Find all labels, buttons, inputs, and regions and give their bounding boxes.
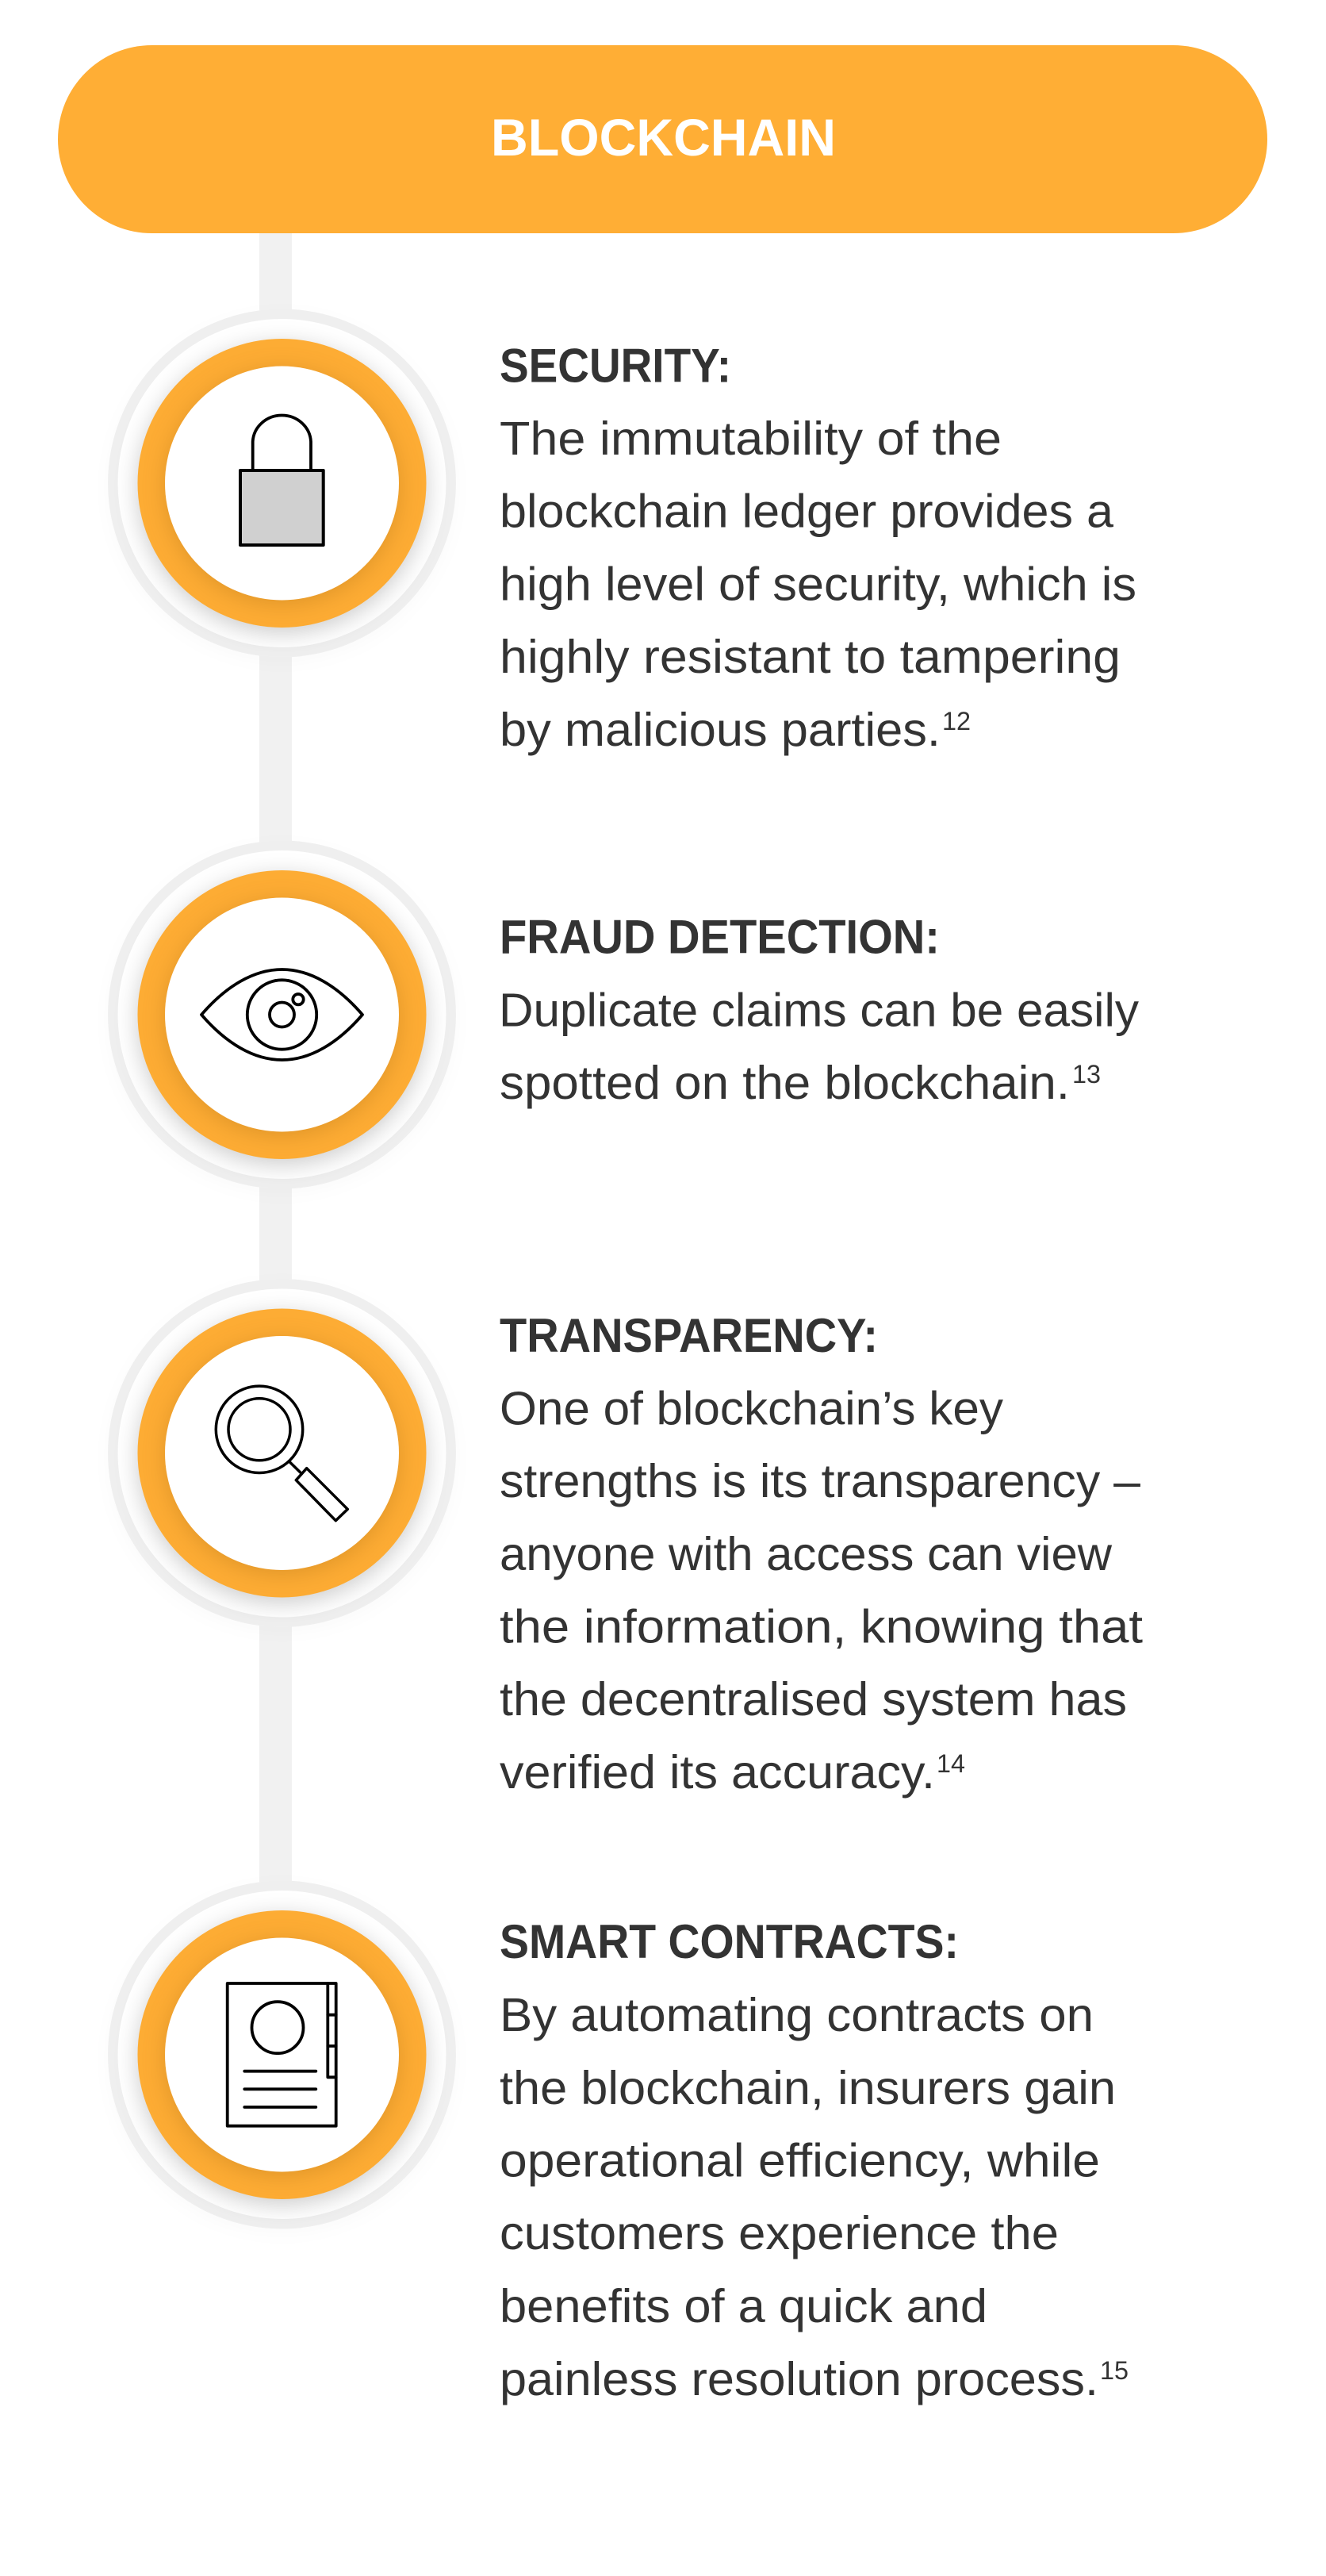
step 2: fraud detection badge <box>113 846 451 1184</box>
step 2: fraud detection text: Duplicate claims can be easily <box>499 984 1140 1036</box>
step 1: security text: by malicious parties. <box>500 704 941 756</box>
step 1: security text: highly resistant to tampering <box>500 631 1121 683</box>
step 2: fraud detection text <box>499 911 1140 1109</box>
step 1: security badge <box>113 314 451 652</box>
step 1: security text: The immutability of the <box>500 413 1002 465</box>
step 4: smart contracts text: the blockchain, insurers gain <box>500 2062 1116 2114</box>
step 3: transparency text: TRANSPARENCY: <box>500 1309 878 1362</box>
step 3: transparency text: strengths is its transparency – <box>500 1455 1140 1507</box>
step 1: security text: blockchain ledger provides a <box>500 486 1113 538</box>
step 1: security text: high level of security, which is <box>500 558 1136 610</box>
title banner <box>58 45 1267 233</box>
step 1: security text: SECURITY: <box>500 340 731 392</box>
step 4: smart contracts text: customers experience the <box>500 2207 1059 2259</box>
step 4: smart contracts text: By automating contracts on <box>500 1989 1094 2041</box>
icon: contract document <box>228 1983 336 2126</box>
step 3: transparency text: 14 <box>937 1749 965 1778</box>
step 3: transparency badge <box>113 1284 451 1622</box>
step 4: smart contracts text: benefits of a quick and <box>500 2280 987 2332</box>
step 2: fraud detection text: 13 <box>1072 1060 1101 1088</box>
step 3: transparency text: the decentralised system has <box>500 1673 1127 1726</box>
icon: eye <box>201 969 362 1060</box>
step 4: smart contracts text: painless resolution process. <box>500 2353 1098 2405</box>
vertical connector line <box>259 230 292 1912</box>
step 3: transparency text: anyone with access can view <box>500 1528 1112 1580</box>
step 3: transparency text: the information, knowing that <box>500 1601 1143 1653</box>
step 1: security text: 12 <box>942 707 971 735</box>
step 2: fraud detection text: FRAUD DETECTION: <box>500 911 940 964</box>
step 4: smart contracts text: 15 <box>1100 2356 1129 2385</box>
step 3: transparency text: verified its accuracy. <box>500 1746 935 1799</box>
step 4: smart contracts text: SMART CONTRACTS: <box>500 1915 959 1968</box>
step 3: transparency text: One of blockchain’s key <box>500 1383 1003 1435</box>
step 3: transparency text <box>500 1309 1143 1799</box>
step 2: fraud detection text: spotted on the blockchain. <box>500 1057 1070 1109</box>
step 4: smart contracts text: operational efficiency, while <box>500 2135 1100 2187</box>
step 4: smart contracts text <box>500 1915 1129 2405</box>
step 4: smart contracts badge <box>113 1886 451 2224</box>
icon: padlock <box>240 416 324 545</box>
step 1: security text <box>500 340 1136 756</box>
title banner: BLOCKCHAIN <box>491 108 836 167</box>
icon: magnifying glass <box>216 1386 347 1521</box>
